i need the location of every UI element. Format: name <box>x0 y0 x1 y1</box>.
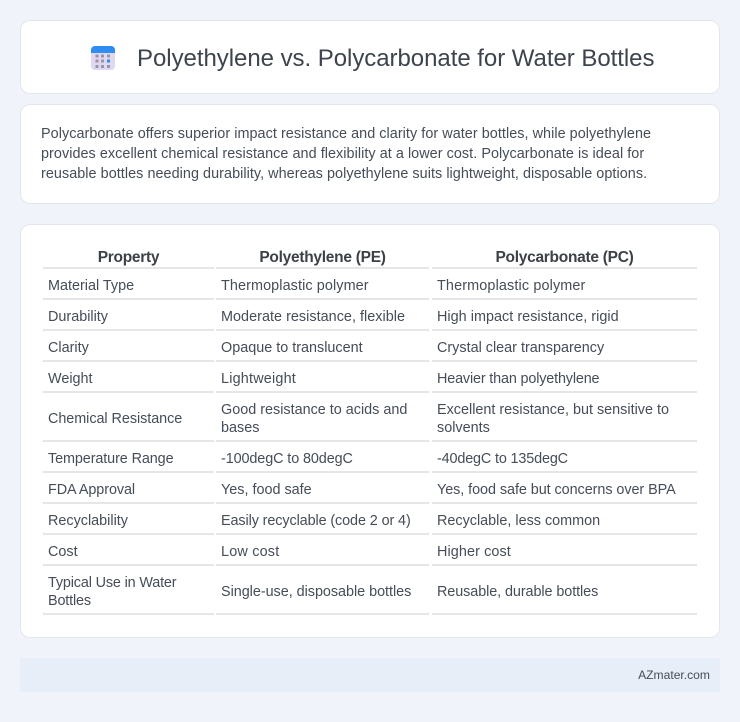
summary text: reusable bottles needing durability, whereas polyethylene suits lightweight, disposable options. <box>41 166 647 182</box>
table rows: Yes, food safe but concerns over BPA <box>437 482 676 498</box>
table rows: Yes, food safe <box>221 482 312 498</box>
table rows: -40degC to 135degC <box>437 451 568 467</box>
table rows: Recyclable, less common <box>437 513 600 529</box>
table rows: Bottles <box>48 593 91 609</box>
table header: Property <box>98 249 159 266</box>
panel: summary <box>20 104 720 204</box>
table rows: Good resistance to acids and <box>221 402 407 418</box>
table rows: Easily recyclable (code 2 or 4) <box>221 513 411 529</box>
table rows: Chemical Resistance <box>48 411 182 427</box>
table rows: Crystal clear transparency <box>437 340 604 356</box>
table rows: High impact resistance, rigid <box>437 309 619 325</box>
table rows: -100degC to 80degC <box>221 451 353 467</box>
table header <box>98 249 634 266</box>
table rows: solvents <box>437 420 490 436</box>
icon: calendar <box>91 46 115 70</box>
table rows: Opaque to translucent <box>221 340 363 356</box>
table rows: Excellent resistance, but sensitive to <box>437 402 669 418</box>
table rows: Material Type <box>48 278 134 294</box>
summary text <box>41 126 651 182</box>
table rows: Weight <box>48 371 93 387</box>
table header: Polycarbonate (PC) <box>495 249 634 266</box>
panel: title card <box>20 20 720 94</box>
table rows: Low cost <box>221 544 279 560</box>
table rows: Typical Use in Water <box>48 575 176 591</box>
table rows: Single-use, disposable bottles <box>221 584 411 600</box>
table rows: Durability <box>48 309 108 325</box>
table rows: Higher cost <box>437 544 511 560</box>
table rows: FDA Approval <box>48 482 135 498</box>
table rows: bases <box>221 420 259 436</box>
summary text: provides excellent chemical resistance and flexibility at a lower cost. Polycarbonate is ideal for <box>41 146 644 162</box>
table rows: Lightweight <box>221 371 296 387</box>
table rows: Clarity <box>48 340 89 356</box>
table rows: Reusable, durable bottles <box>437 584 598 600</box>
table rows: Recyclability <box>48 513 128 529</box>
table rows: Temperature Range <box>48 451 174 467</box>
table rows: Heavier than polyethylene <box>437 371 599 387</box>
table rows: Moderate resistance, flexible <box>221 309 405 325</box>
table rows: Thermoplastic polymer <box>221 278 369 294</box>
panel: comparison table <box>20 224 720 638</box>
table rows: Thermoplastic polymer <box>437 278 586 294</box>
title: Polyethylene vs. Polycarbonate for Water Bottles <box>137 45 654 72</box>
table rows: Cost <box>48 544 78 560</box>
table header: Polyethylene (PE) <box>259 249 386 266</box>
footer bar <box>20 658 720 692</box>
footer credit: AZmater.com <box>638 668 710 682</box>
summary text: Polycarbonate offers superior impact resistance and clarity for water bottles, while polyethylene <box>41 126 651 142</box>
